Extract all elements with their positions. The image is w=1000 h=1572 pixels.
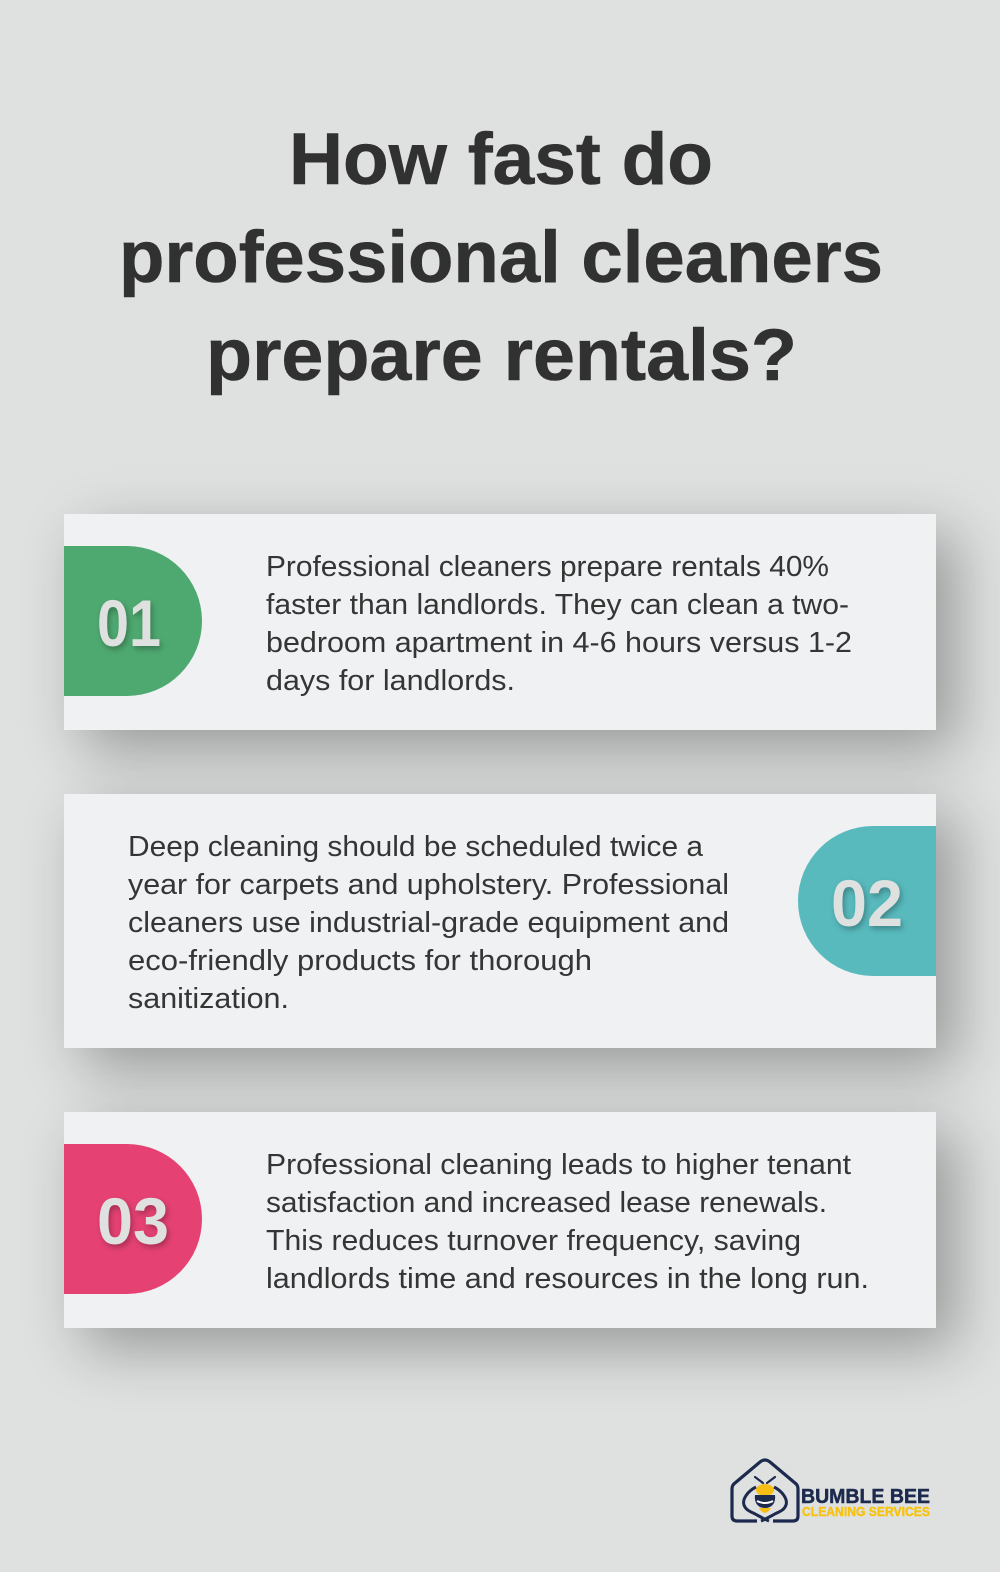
text: step 02 description: eco-friendly products for thorough: [128, 945, 592, 977]
title: professional cleaners: [119, 217, 883, 298]
text: step 03 description: This reduces turnover frequency, saving: [266, 1225, 801, 1257]
text: step 01 description: faster than landlords. They can clean a two-: [266, 589, 849, 621]
logo wordmark: BUMBLE BEE: [801, 1485, 930, 1508]
text: step 02 description: year for carpets and upholstery. Professional: [128, 869, 729, 901]
title: How fast do: [289, 119, 713, 200]
badge: 02: 02: [831, 866, 903, 940]
logo wordmark: CLEANING SERVICES: [802, 1504, 930, 1519]
badge: 03: 03: [97, 1184, 169, 1258]
text: step 01 description: [266, 551, 852, 697]
text: step 02 description: sanitization.: [128, 983, 289, 1015]
text: step 03 description: Professional cleaning leads to higher tenant: [266, 1149, 851, 1181]
text: step 01 description: days for landlords.: [266, 665, 515, 697]
icon: house outline with bee: [732, 1460, 798, 1521]
text: step 01 description: Professional cleaners prepare rentals 40%: [266, 551, 829, 583]
panel: step 01: [64, 514, 936, 730]
badge: 03: [64, 1144, 202, 1294]
title: [119, 119, 883, 396]
text: step 01 description: bedroom apartment in 4-6 hours versus 1-2: [266, 627, 852, 659]
badge: 01: [64, 546, 202, 696]
text: step 02 description: Deep cleaning should be scheduled twice a: [128, 831, 704, 863]
text: step 03 description: [266, 1149, 869, 1295]
title: prepare rentals?: [206, 315, 797, 396]
logo: Bumble Bee Cleaning Services: [730, 1458, 930, 1523]
badge: 02: [798, 826, 936, 976]
panel: step 03: [64, 1112, 936, 1328]
panel: step 02: [64, 794, 936, 1048]
text: step 03 description: satisfaction and increased lease renewals.: [266, 1187, 827, 1219]
badge: 01: 01: [97, 586, 161, 660]
logo wordmark: [801, 1485, 930, 1519]
text: step 02 description: [128, 831, 729, 1015]
text: step 02 description: cleaners use industrial-grade equipment and: [128, 907, 729, 939]
text: step 03 description: landlords time and resources in the long run.: [266, 1263, 869, 1295]
